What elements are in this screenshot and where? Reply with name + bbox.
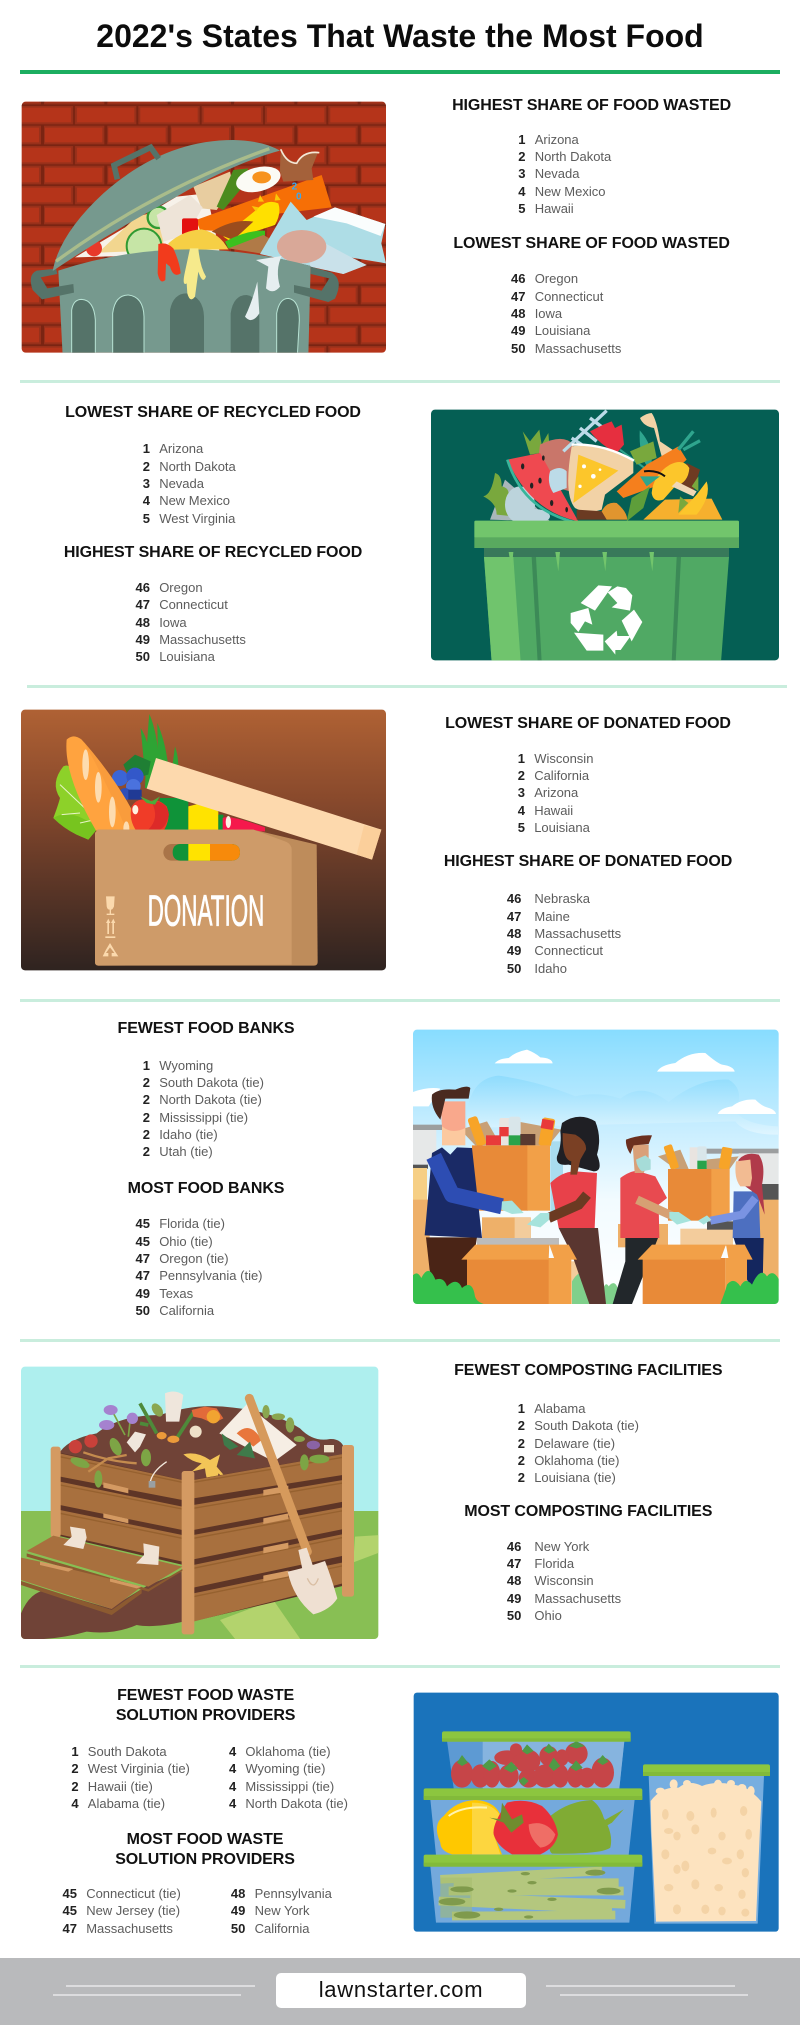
ranked list: South Dakota (tie) [159,1075,264,1090]
ranked list: Wisconsin [534,751,593,766]
ranked list: Connecticut [159,597,228,612]
panel: composting facilities [21,1362,722,1639]
ranked list: Arizona [535,132,579,147]
ranked list: Massachusetts [535,341,621,356]
ranked list: Nevada [535,166,580,181]
food scraps: 0 [296,191,302,202]
icon: recycling symbol [571,585,642,655]
wooden crate [51,1445,354,1634]
ranked list: second column: 49 [231,1903,245,1918]
compost pile with scraps [60,1392,343,1480]
right bag of groceries [658,1144,739,1221]
ranked list: 2 [518,768,525,783]
ranked list: Wyoming [159,1058,213,1073]
ranked list: first column: 2 [71,1761,79,1776]
ranked list: second column: Oklahoma (tie) [245,1744,331,1759]
ranked list: 50 [136,649,150,664]
ranked list: 1 [518,132,526,147]
heading: LOWEST SHARE OF DONATED FOOD [445,715,731,732]
ranked list: second column [231,1886,332,1936]
heading [115,1830,295,1868]
ranked list [518,1401,639,1485]
ranked list: second column: California [255,1921,310,1936]
ranked list: 47 [507,1556,521,1571]
illustration: green recycling bin [431,410,779,660]
ranked list: second column [229,1744,348,1811]
heading: FEWEST FOOD WASTE [117,1687,294,1704]
bin [474,521,739,662]
website badge: lawnstarter.com [319,1977,483,2002]
ranked list: Louisiana [534,820,590,835]
ranked list: first column [71,1744,190,1811]
footer [0,1958,800,2025]
ranked list: Arizona [534,785,578,800]
ranked list: Oregon [159,580,203,595]
woman in blue shirt [698,1154,765,1285]
ranked list: Connecticut [535,289,603,304]
ranked list: first column: 45 [63,1886,77,1901]
ranked list [507,1539,621,1623]
ranked list: Oregon (tie) [159,1251,229,1266]
ranked list: 47 [511,289,526,304]
panel: share of donated food [21,710,732,976]
ranked list: 2 [518,1436,525,1451]
ranked list: 48 [136,615,150,630]
food scraps [483,411,722,524]
ranked list: second column: Mississippi (tie) [245,1779,334,1794]
ranked list: 1 [518,1401,525,1416]
ranked list: 46 [511,271,526,286]
ranked list: West Virginia [159,511,235,526]
ranked list: Wisconsin [534,1573,594,1588]
ranked list: first column: Hawaii (tie) [88,1779,153,1794]
ranked list [142,441,236,526]
title underline [20,70,780,74]
ranked list: Mississippi (tie) [159,1110,248,1125]
ranked list: Hawaii [534,803,573,818]
ranked list: second column: 50 [231,1921,245,1936]
ranked list: 1 [143,1058,150,1073]
ranked list: Ohio (tie) [159,1234,213,1249]
ranked list: 4 [518,803,525,818]
heading [116,1687,295,1724]
ranked list: 4 [518,184,526,199]
ranked list [136,1216,263,1318]
ranked list: 2 [143,459,150,474]
ranked list: first column [62,1886,181,1936]
groceries [53,714,265,840]
ranked list: first column: West Virginia (tie) [88,1761,190,1776]
label: DONATION: DONATION [148,888,264,936]
panel: food waste solution providers [62,1687,779,1936]
ranked list: Delaware (tie) [534,1436,615,1451]
can body [31,243,339,356]
ranked list: first column: Alabama (tie) [88,1796,165,1811]
ranked list: second column: 4 [229,1796,236,1811]
ranked list: 3 [143,476,150,491]
heading: FEWEST COMPOSTING FACILITIES [454,1362,722,1379]
ranked list: first column: 1 [71,1744,79,1759]
heading: MOST FOOD BANKS [128,1180,284,1197]
ranked list: North Dakota [159,459,236,474]
handling icons [103,896,118,956]
ranked list: Oregon [535,271,578,286]
illustration: volunteers handing out food boxes [413,1030,779,1304]
ranked list: second column: 4 [229,1779,236,1794]
ranked list: Massachusetts [534,1591,621,1606]
ranked list: first column: 2 [71,1779,79,1794]
ranked list: 48 [507,1573,521,1588]
tall container: oats [643,1764,770,1924]
man in blue sweater [425,1087,524,1291]
ranked list: Utah (tie) [159,1144,213,1159]
ranked list: 47 [136,1251,150,1266]
woman in red shirt [527,1117,606,1304]
ranked list: second column: 4 [229,1761,236,1776]
ranked list: 45 [136,1234,150,1249]
drop-down door [21,1527,182,1615]
ranked list: first column: Massachusetts [86,1921,173,1936]
middle container: bell peppers [424,1788,642,1855]
ranked list [507,891,621,976]
ranked list: 47 [507,909,521,924]
ranked list: Texas [159,1286,193,1301]
man in mask [613,1135,691,1304]
heading: LOWEST SHARE OF FOOD WASTED [453,235,730,252]
shovel [249,1398,337,1614]
ranked list: New York [534,1539,589,1554]
ranked list: second column: Pennsylvania [255,1886,332,1901]
ranked list: Iowa [159,615,187,630]
ranked list: first column: 4 [71,1796,79,1811]
ranked list: second column: 4 [229,1744,236,1759]
sky, clouds and mountains [413,1050,778,1135]
ranked list: 46 [507,1539,521,1554]
illustration: donation box [21,710,386,970]
illustration: wooden compost bin [21,1366,378,1639]
cardboard boxes [461,1245,753,1305]
ranked list: Arizona [159,441,203,456]
ranked list: 5 [518,820,525,835]
ranked list: Iowa [535,306,562,321]
ranked list: 2 [143,1075,150,1090]
ranked list: 49 [507,943,521,958]
top container: strawberries [442,1731,631,1788]
ranked list [136,580,246,664]
ranked list: Louisiana [535,323,590,338]
ranked list: Alabama [534,1401,586,1416]
ranked list: Florida (tie) [159,1216,225,1231]
ranked list: North Dakota [535,149,611,164]
ranked list: South Dakota (tie) [534,1418,639,1433]
ranked list: 2 [518,149,526,164]
ranked list: Nevada [159,476,204,491]
ranked list: 50 [136,1303,150,1318]
banana peel and twig [69,1452,329,1488]
lid [53,140,280,271]
box [95,830,318,966]
ranked list [518,751,593,835]
ranked list: Maine [534,909,570,924]
ranked list: 1 [143,441,150,456]
bushes [412,1271,780,1304]
ranked list: Louisiana [159,649,215,664]
ranked list: Massachusetts [534,926,621,941]
heading: MOST FOOD WASTE [127,1830,283,1848]
panel: share of recycled food [64,404,779,664]
illustration: overflowing trash can [22,102,386,353]
ranked list: second column: New York [255,1903,310,1918]
buildings [413,1125,779,1305]
ranked list: Florida [534,1556,574,1571]
left bag of groceries [460,1116,561,1211]
ranked list: 3 [518,785,525,800]
ranked list: Ohio [534,1608,562,1623]
panel: share of food wasted [22,97,731,356]
ranked list: 46 [136,580,150,595]
ranked list: 49 [511,323,526,338]
open lid [147,758,381,860]
ranked list: California [534,768,589,783]
ranked list: Pennsylvania (tie) [159,1268,263,1283]
ranked list: first column: New Jersey (tie) [86,1903,180,1918]
ranked list [143,1058,264,1159]
ranked list: 50 [507,961,521,976]
ranked list: Idaho (tie) [159,1127,218,1142]
ranked list: 1 [518,751,525,766]
ranked list: 47 [136,1268,150,1283]
ranked list: 3 [518,166,526,181]
ranked list: New Mexico [535,184,605,199]
ranked list: 2 [143,1092,150,1107]
ranked list: California [159,1303,214,1318]
food scraps: 2 [292,181,298,192]
ranked list: 49 [136,632,150,647]
heading: HIGHEST SHARE OF DONATED FOOD [444,853,732,870]
ranked list: Idaho [534,961,567,976]
ranked list: Hawaii [535,201,574,216]
illustration: stacked food containers [414,1692,779,1932]
ranked list: first column: South Dakota [88,1744,167,1759]
ranked list: second column: Wyoming (tie) [245,1761,325,1776]
heading: SOLUTION PROVIDERS [115,1850,295,1868]
ranked list: Nebraska [534,891,590,906]
ranked list: Louisiana (tie) [534,1470,616,1485]
ranked list: Massachusetts [159,632,246,647]
heading: MOST COMPOSTING FACILITIES [464,1503,712,1520]
ranked list: 2 [143,1110,150,1125]
bottom container: asparagus [424,1855,642,1923]
ranked list: New Mexico [159,493,230,508]
ranked list: 2 [518,1453,525,1468]
ranked list: second column: North Dakota (tie) [245,1796,348,1811]
ranked list: 5 [143,511,150,526]
heading: FEWEST FOOD BANKS [118,1020,294,1037]
ranked list: 4 [143,493,150,508]
ranked list: first column: 47 [63,1921,77,1936]
ranked list: North Dakota (tie) [159,1092,262,1107]
ranked list: Oklahoma (tie) [534,1453,619,1468]
heading: HIGHEST SHARE OF RECYCLED FOOD [64,544,362,561]
panel: food banks [118,1020,779,1318]
ranked list: 50 [507,1608,521,1623]
ranked list: Connecticut [534,943,603,958]
ranked list: 2 [518,1418,525,1433]
ranked list: first column: 45 [63,1903,77,1918]
ranked list: 49 [136,1286,150,1301]
ranked list: 45 [136,1216,150,1231]
ranked list: 48 [507,926,521,941]
ranked list: first column: Connecticut (tie) [86,1886,181,1901]
heading: HIGHEST SHARE OF FOOD WASTED [452,97,731,114]
ranked list: 2 [143,1127,150,1142]
ranked list: 49 [507,1591,521,1606]
ranked list: 47 [136,597,150,612]
ranked list: second column: 48 [231,1886,245,1901]
heading: LOWEST SHARE OF RECYCLED FOOD [65,404,361,421]
ranked list: 50 [511,341,526,356]
ranked list [511,271,621,356]
ranked list: 2 [143,1144,150,1159]
website badge [276,1973,526,2008]
heading: SOLUTION PROVIDERS [116,1707,295,1724]
ranked list: 5 [518,201,526,216]
ranked list: 48 [511,306,526,321]
ranked list: 46 [507,891,521,906]
ranked list: 2 [518,1470,525,1485]
title: 2022's States That Waste the Most Food [96,18,704,54]
compost spill [21,1572,183,1639]
ranked list [518,132,612,216]
food scraps [75,148,386,274]
